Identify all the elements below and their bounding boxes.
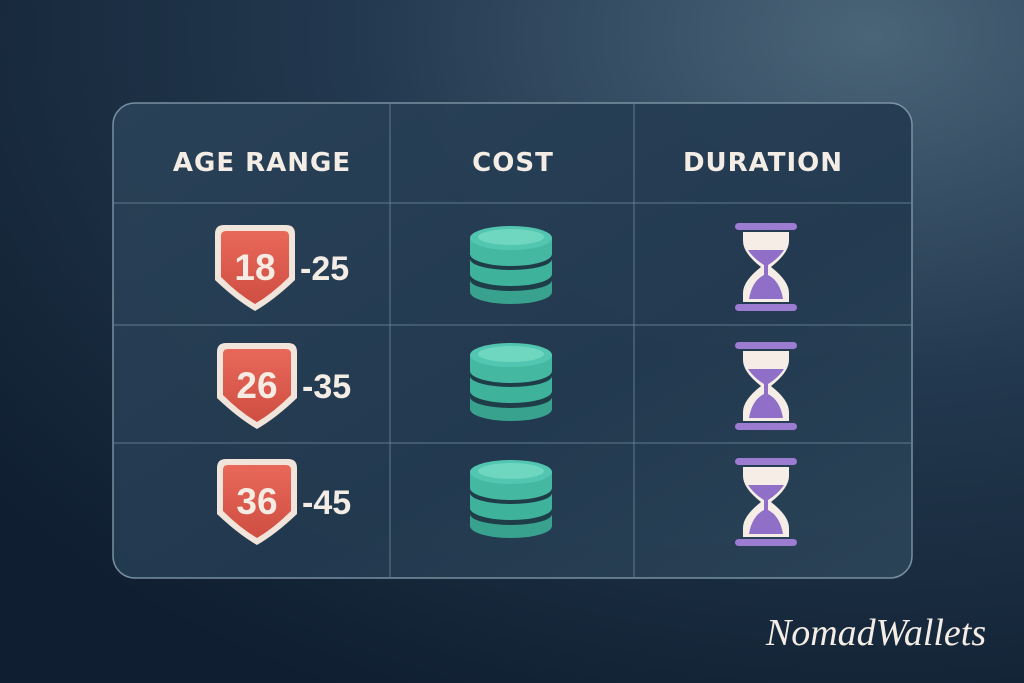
heading: age range: AGE RANGE bbox=[173, 148, 351, 178]
row 1 age badge: 18 bbox=[234, 247, 276, 288]
row 2 age badge: 26 bbox=[236, 365, 278, 406]
icon: hourglass row 3 bbox=[735, 458, 797, 546]
icon: coins row 2 bbox=[470, 343, 552, 421]
row 1 age badge bbox=[215, 225, 349, 311]
icon: coins row 3 bbox=[470, 460, 552, 538]
row 2 age badge: -35 bbox=[302, 368, 351, 406]
icon: hourglass row 2 bbox=[735, 342, 797, 430]
row 1 age badge: -25 bbox=[300, 250, 349, 288]
panel: table bbox=[113, 103, 912, 578]
heading: duration: DURATION bbox=[683, 148, 843, 178]
brand logo: NomadWallets bbox=[765, 612, 986, 654]
heading: cost: COST bbox=[472, 148, 554, 178]
icon: hourglass row 1 bbox=[735, 223, 797, 311]
icon: coins row 1 bbox=[470, 226, 552, 304]
row 3 age badge: 36 bbox=[236, 481, 278, 522]
row 3 age badge bbox=[217, 459, 351, 545]
row 3 age badge: -45 bbox=[302, 484, 351, 522]
row 2 age badge bbox=[217, 343, 351, 429]
